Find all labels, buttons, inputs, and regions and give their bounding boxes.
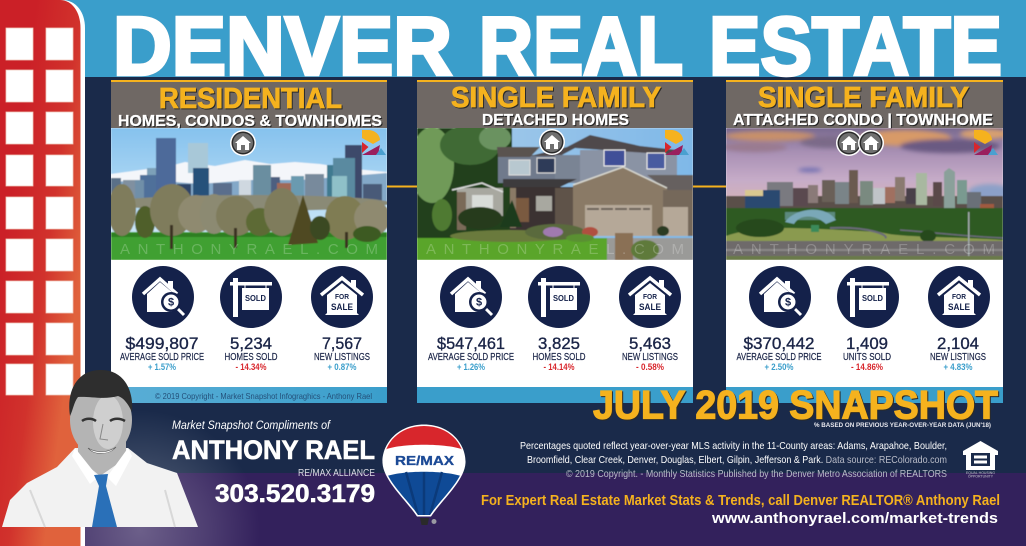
panel header: RESIDENTIAL	[159, 83, 342, 115]
stat: average sold price: + 1.57%	[148, 362, 176, 372]
agent contact block: Market Snapshot Compliments of	[172, 420, 332, 432]
stat: homes sold	[220, 266, 282, 372]
panel: single family detached	[410, 80, 693, 403]
stat: homes sold: - 14.14%	[544, 362, 574, 372]
stat: average sold price: AVERAGE SOLD PRICE	[428, 352, 514, 363]
icon: corner logo	[362, 130, 386, 155]
icon: equal housing opportunity	[963, 441, 998, 478]
stat: average sold price	[120, 266, 204, 372]
photo: Denver skyline at dusk	[723, 128, 1012, 260]
title: DENVER REAL ESTATE	[113, 0, 1002, 92]
data source note: © 2019 Copyright. - Monthly Statistics Published by the Denver Metro Association of REALTORS	[566, 468, 947, 480]
face features	[82, 419, 125, 421]
stat: homes sold: SOLD	[245, 294, 266, 303]
panel header: HOMES, CONDOS & TOWNHOMES	[118, 113, 382, 130]
stat: new listings: 7,567	[322, 334, 362, 353]
agent portrait	[2, 370, 198, 527]
panel header: SINGLE FAMILY	[451, 82, 661, 114]
photo: Denver skyline and park	[108, 128, 390, 260]
stat: homes sold: - 14.34%	[236, 362, 266, 372]
stat: homes sold: SOLD	[553, 294, 574, 303]
data source note: Percentages quoted reflect year-over-year MLS activity in the 11-County areas: Adams, Arapahoe, Boulder,	[520, 440, 947, 452]
stat: new listings: + 4.83%	[944, 362, 972, 372]
soft light behind agent portrait	[85, 405, 365, 546]
stat: units sold	[837, 266, 899, 372]
tie	[92, 474, 117, 527]
footer band	[726, 387, 1003, 403]
neck	[78, 430, 126, 476]
agent contact block: 303.520.3179	[215, 480, 375, 508]
call to action	[481, 493, 1000, 527]
red building with windows	[0, 0, 85, 546]
title: DENVER REAL ESTATE: REAL	[479, 0, 683, 92]
copyright band	[111, 387, 387, 403]
title: DENVER REAL ESTATE: ESTATE	[709, 0, 1002, 92]
stat: new listings: SALE	[639, 302, 661, 313]
stat: new listings: NEW LISTINGS	[314, 352, 370, 363]
stat: units sold: UNITS SOLD	[843, 352, 891, 363]
data source note	[520, 440, 947, 480]
stat: new listings: 2,104	[937, 334, 979, 353]
panel base	[726, 80, 1003, 387]
stat: units sold: SOLD	[862, 294, 883, 303]
panel: residential	[108, 80, 390, 403]
top blue banner	[0, 0, 1026, 77]
stat: average sold price: $	[785, 296, 791, 308]
stat: average sold price: $370,442	[744, 334, 814, 353]
panel base	[111, 80, 387, 387]
agent contact block	[172, 420, 375, 508]
stat: new listings: FOR	[335, 292, 350, 301]
bottom purple footer band	[0, 473, 1026, 546]
copyright band: © 2019 Copyright - Market Snapshot Infograghics - Anthony Rael	[155, 391, 372, 401]
panel header	[417, 80, 693, 129]
watermark: ANTHONYRAEL.COM	[120, 241, 378, 258]
watermark: ANTHONYRAEL.COM	[426, 241, 684, 258]
stat: new listings: NEW LISTINGS	[622, 352, 678, 363]
snapshot heading: JULY 2019 SNAPSHOT	[593, 384, 998, 428]
icon: corner logo	[974, 130, 998, 155]
stat: new listings: FOR	[643, 292, 658, 301]
stat: average sold price: AVERAGE SOLD PRICE	[736, 352, 822, 363]
RE/MAX balloon logo: RE/MAX	[395, 453, 454, 468]
stat: homes sold: HOMES SOLD	[532, 352, 586, 363]
stat: homes sold	[528, 266, 590, 372]
icon: single house badge	[230, 130, 256, 156]
title: DENVER REAL ESTATE: DENVER	[113, 0, 452, 92]
stat: new listings: - 0.58%	[636, 362, 664, 372]
icon: equal housing opportunity: OPPORTUNITY	[968, 474, 994, 478]
icon: equal housing opportunity: EQUAL HOUSING	[966, 471, 995, 475]
panel header	[726, 80, 1003, 129]
stat: new listings: + 0.87%	[328, 362, 356, 372]
stat: average sold price: $	[168, 296, 174, 308]
stat: new listings	[311, 266, 373, 372]
watermark: ANTHONYRAEL.COM	[733, 241, 995, 258]
photo: detached house	[410, 125, 693, 260]
stat: average sold price: + 2.50%	[764, 362, 794, 372]
gold connector lines between panels	[387, 186, 726, 188]
panel: single family attached	[723, 80, 1012, 403]
footer band	[417, 387, 693, 403]
stat: homes sold: 3,825	[538, 334, 580, 353]
snapshot heading: % BASED ON PREVIOUS YEAR-OVER-YEAR DATA (JUN'18)	[814, 423, 991, 429]
icon: double house badge	[836, 130, 884, 156]
stat: new listings: NEW LISTINGS	[930, 352, 986, 363]
icon: single house badge	[539, 129, 565, 155]
panel header: DETACHED HOMES	[482, 112, 629, 129]
stat: units sold: 1,409	[846, 334, 888, 353]
icon: corner logo	[665, 130, 689, 155]
stat: average sold price: + 1.26%	[457, 362, 485, 372]
stat: units sold: - 14.86%	[851, 362, 883, 372]
panel header: SINGLE FAMILY	[758, 82, 969, 114]
stat: new listings: FOR	[952, 292, 967, 301]
panel header: ATTACHED CONDO | TOWNHOME	[733, 112, 993, 129]
stat: homes sold: 5,234	[230, 334, 272, 353]
panel base	[417, 80, 693, 387]
stat: homes sold: HOMES SOLD	[224, 352, 278, 363]
data source note: Broomfield, Clear Creek, Denver, Douglas, Elbert, Gilpin, Jefferson & Park. Data source: REColorado.com	[527, 454, 947, 466]
stat: average sold price	[736, 266, 822, 372]
stat: new listings	[619, 266, 681, 372]
stat: average sold price: $547,461	[437, 334, 505, 353]
agent contact block: ANTHONY RAEL	[172, 435, 375, 465]
shirt	[2, 448, 198, 527]
stat: average sold price	[428, 266, 514, 372]
stat: average sold price: AVERAGE SOLD PRICE	[120, 352, 204, 363]
RE/MAX balloon logo	[380, 424, 470, 525]
hair	[69, 370, 132, 416]
agent contact block: RE/MAX ALLIANCE	[298, 468, 375, 479]
call to action: www.anthonyrael.com/market-trends	[711, 510, 998, 527]
stat: new listings	[928, 266, 990, 372]
stat: new listings: 5,463	[629, 334, 671, 353]
stat: average sold price: $	[476, 296, 482, 308]
stat: average sold price: $499,807	[126, 334, 198, 353]
head	[70, 383, 132, 457]
panel header	[111, 80, 387, 130]
stat: new listings: SALE	[948, 302, 970, 313]
stat: new listings: SALE	[331, 302, 353, 313]
